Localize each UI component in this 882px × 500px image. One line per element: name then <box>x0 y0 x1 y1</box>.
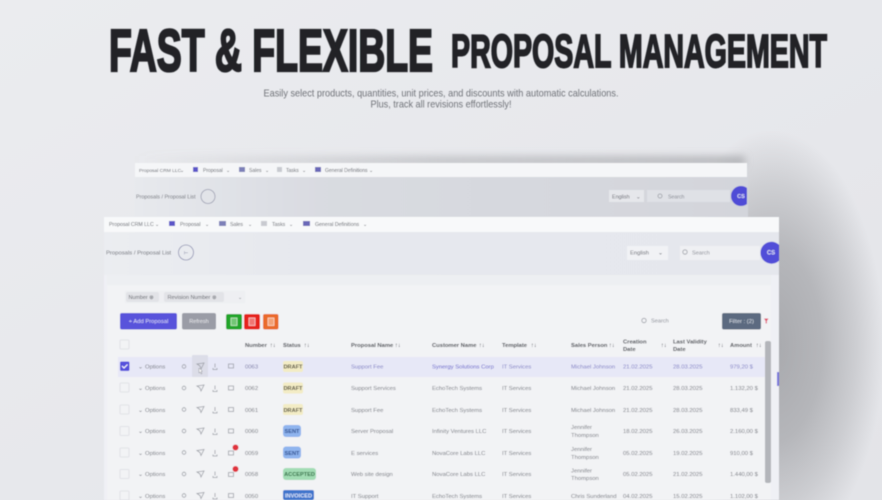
row 0062: 1.132,20 $ <box>730 386 759 392</box>
back navigation bar: General Definitions <box>325 168 368 174</box>
table search <box>642 318 669 325</box>
row 0063: 979,20 $ <box>730 364 754 370</box>
back navigation bar: Proposal CRM LLC <box>139 169 181 174</box>
front navigation bar: Tasks <box>272 222 285 228</box>
row 0060: IT Services <box>502 429 531 435</box>
front search <box>680 246 760 260</box>
row 0063: Synergy Solutions Corp <box>432 364 495 370</box>
row 0060: Infinity Ventures LLC <box>432 429 487 435</box>
row 0061: Support Fee <box>351 408 384 414</box>
row 0062: EchoTech Systems <box>432 386 482 392</box>
row 0061: IT Services <box>502 408 531 414</box>
table header: ↑↓ <box>479 343 485 349</box>
row 0058: ACCEPTED <box>284 472 315 478</box>
row 0058: Web site design <box>351 472 393 478</box>
row 0058: Thompson <box>571 476 599 482</box>
row 0060: 2.160,00 $ <box>730 429 759 435</box>
row 0058: 05.02.2025 <box>623 472 653 478</box>
pdf export button <box>244 314 260 330</box>
excel export button <box>226 314 242 330</box>
row 0063: Options <box>145 364 165 370</box>
row 0063: IT Services <box>502 364 531 370</box>
front language selector: ⌄ <box>658 250 663 256</box>
word export button <box>263 314 278 330</box>
row 0059: Jennifer <box>571 447 592 453</box>
filter button: Filter : (2) <box>729 319 754 325</box>
back navigation bar: ⌄ <box>180 169 184 174</box>
row 0058: 1.440,00 $ <box>730 472 759 478</box>
back language and search: English <box>612 194 630 200</box>
front window <box>104 217 779 500</box>
back breadcrumb <box>136 190 215 204</box>
row 0059: SENT <box>285 451 300 457</box>
row 0059: 910,00 $ <box>730 451 754 457</box>
back navigation bar: Proposal <box>203 168 223 174</box>
table header <box>120 340 762 353</box>
back navigation bar: ⌄ <box>265 168 269 174</box>
back navigation bar: ⌄ <box>226 168 230 174</box>
add proposal button <box>120 313 177 330</box>
top content band <box>107 275 771 285</box>
row 0050: IT Services <box>502 494 531 500</box>
back navigation bar: Sales <box>249 168 262 174</box>
table header: ↑↓ <box>661 343 667 349</box>
front navigation bar: Proposal CRM LLC <box>109 222 154 228</box>
front language selector <box>627 246 668 260</box>
refresh button <box>182 313 216 330</box>
selected row highlight <box>118 357 768 377</box>
row 0063: Michael Johnson <box>571 364 615 370</box>
front navigation bar: ⌄ <box>363 222 367 228</box>
filter chips: Number ⊗ <box>128 295 154 301</box>
row 0061: Michael Johnson <box>571 408 615 414</box>
front navigation bar: ⌄ <box>248 222 252 228</box>
front navigation bar: ⌄ <box>289 222 293 228</box>
row 0061 <box>120 404 754 415</box>
front navigation bar: ⌄ <box>155 222 159 228</box>
row 0062: Options <box>145 386 165 392</box>
row 0059: IT Services <box>502 451 531 457</box>
row 0058: Options <box>145 472 165 478</box>
row 0060: 18.02.2025 <box>623 429 653 435</box>
row 0059: ⌄ <box>138 451 143 457</box>
content panel <box>107 275 771 500</box>
row 0061: 833,49 $ <box>730 408 754 414</box>
row 0059: 19.02.2025 <box>673 451 703 457</box>
front search: Search <box>692 250 710 256</box>
row 0050: ⌄ <box>138 494 143 500</box>
row 0061: DRAFT <box>284 408 303 414</box>
row 0058: 0058 <box>245 472 259 478</box>
window drop shadow <box>135 125 882 500</box>
back navigation bar: ⌄ <box>302 168 306 174</box>
subtitle: Easily select products, quantities, unit prices, and discounts with automatic calculations. <box>264 88 618 100</box>
row 0063: Support Fee <box>351 364 384 370</box>
table header: Template <box>502 343 527 349</box>
row 0061: 28.03.2025 <box>673 408 703 414</box>
back navigation bar: Tasks <box>286 168 299 174</box>
table header: Sales Person <box>571 343 607 349</box>
row 0060: 26.03.2025 <box>673 429 703 435</box>
row 0062: 28.03.2025 <box>673 386 703 392</box>
front navigation bar: General Definitions <box>315 222 359 228</box>
table header: ↑↓ <box>304 343 310 349</box>
front breadcrumb: ⊢ <box>184 250 188 256</box>
refresh button: Refresh <box>189 319 209 325</box>
table header: Creation <box>623 340 647 346</box>
table header: Last Validity <box>673 340 708 346</box>
row 0061: EchoTech Systems <box>432 408 482 414</box>
row 0060: SENT <box>285 429 300 435</box>
row 0060: ⌄ <box>138 429 143 435</box>
front breadcrumb: Proposals / Proposal List <box>106 250 172 256</box>
subtitle: Plus, track all revisions effortlessly! <box>370 98 512 110</box>
back language and search <box>609 190 730 202</box>
row 0058: Jennifer <box>571 468 592 474</box>
row 0062: Support Services <box>351 386 396 392</box>
front navigation bar: ⌄ <box>205 222 209 228</box>
row 0050: 15.02.2025 <box>673 494 703 500</box>
row 0063 <box>120 355 754 377</box>
row 0063: ⌄ <box>138 364 143 370</box>
front language selector: English <box>630 250 649 256</box>
table header: ↑↓ <box>609 343 615 349</box>
row 0061: 0061 <box>245 408 258 414</box>
row 0062: 0062 <box>245 386 258 392</box>
front breadcrumb <box>106 245 194 260</box>
row 0062: IT Services <box>502 386 531 392</box>
table header: Date <box>673 347 686 353</box>
table header: Proposal Name <box>351 343 393 349</box>
row 0050: 04.02.2025 <box>623 494 653 500</box>
row 0063: 0063 <box>245 364 259 370</box>
front navigation bar: Sales <box>230 222 243 228</box>
table header: ↑↓ <box>270 343 276 349</box>
scrollbar <box>765 341 779 483</box>
table header: Number <box>245 343 267 349</box>
table header: ↑↓ <box>718 343 724 349</box>
row 0058 <box>120 466 759 482</box>
row 0050 <box>120 490 759 500</box>
filter chips: Revision Number ⊗ <box>168 295 217 301</box>
row 0062: Michael Johnson <box>571 386 615 392</box>
back avatar: CS <box>737 194 745 200</box>
row 0060 <box>120 425 759 439</box>
filter chips: ⌄ <box>238 295 242 301</box>
back breadcrumb: Proposals / Proposal List <box>136 194 196 200</box>
row 0059: 0059 <box>245 451 258 457</box>
table header: Status <box>283 343 301 349</box>
table header: Date <box>623 347 636 353</box>
row 0063: 28.03.2025 <box>673 364 703 370</box>
row 0063: 21.02.2025 <box>623 364 653 370</box>
table header: Customer Name <box>432 343 476 349</box>
row 0050: INVOICED <box>285 494 312 500</box>
row 0061: Options <box>145 408 165 414</box>
row 0050: IT Support <box>351 494 379 500</box>
row 0063: DRAFT <box>284 364 303 370</box>
row 0062: 21.02.2025 <box>623 386 653 392</box>
row 0061: 21.02.2025 <box>623 408 653 414</box>
front navigation bar: Proposal <box>180 222 200 228</box>
row 0050: Options <box>145 494 165 500</box>
filter chips <box>125 291 245 303</box>
table search: Search <box>651 319 669 325</box>
front navigation bar <box>104 217 779 232</box>
row 0058: IT Services <box>502 472 531 478</box>
row 0060: Server Proposal <box>351 429 393 435</box>
row 0050: EchoTech Systems <box>432 494 482 500</box>
row 0050: 0050 <box>245 494 259 500</box>
row 0059: 05.02.2025 <box>623 451 653 457</box>
back navigation bar: ⌄ <box>369 168 373 174</box>
row 0060: Thompson <box>571 433 599 439</box>
row 0059 <box>120 444 754 461</box>
row 0061: ⌄ <box>138 408 143 414</box>
front header band <box>104 232 779 275</box>
back navigation bar <box>135 163 747 177</box>
table header: Amount <box>730 343 752 349</box>
filter button <box>722 313 768 330</box>
row 0062 <box>120 382 759 394</box>
add proposal button: + Add Proposal <box>129 319 168 325</box>
row 0058: 21.02.2025 <box>673 472 703 478</box>
row 0058: ⌄ <box>138 472 143 478</box>
table header: ↑↓ <box>531 343 537 349</box>
row 0062: DRAFT <box>284 386 303 392</box>
back language and search: Search <box>668 194 685 200</box>
row 0059: NovaCore Labs LLC <box>432 451 486 457</box>
row 0059: Thompson <box>571 455 599 461</box>
back window <box>135 163 748 217</box>
row 0060: Jennifer <box>571 425 592 431</box>
subtitle <box>264 88 618 110</box>
row 0050: Chris Sunderland <box>571 494 617 500</box>
row 0059: E services <box>351 451 378 457</box>
row 0062: ⌄ <box>138 386 143 392</box>
row 0060: 0060 <box>245 429 259 435</box>
row 0059: Options <box>145 451 165 457</box>
row 0060: Options <box>145 429 165 435</box>
row 0058: NovaCore Labs LLC <box>432 472 486 478</box>
table header: ↑↓ <box>756 343 762 349</box>
front avatar: CS <box>767 251 775 257</box>
back language and search: ⌄ <box>636 194 641 200</box>
front avatar <box>760 242 779 264</box>
heading: fast and flexible: FAST & FLEXIBLE <box>109 18 433 84</box>
table header: ↑↓ <box>395 343 401 349</box>
title <box>109 18 827 84</box>
back avatar <box>731 186 747 206</box>
row 0050: 1.102,00 $ <box>730 494 759 500</box>
